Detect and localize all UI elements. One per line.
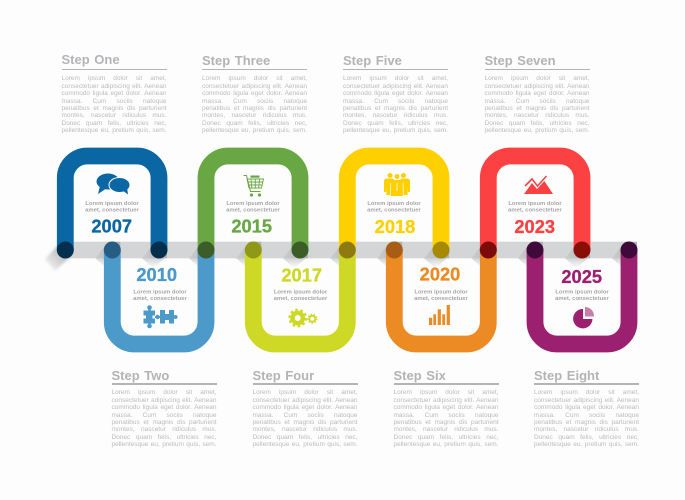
- captions in loops: amet, consectetuer: [226, 208, 281, 214]
- icon: gears: [289, 310, 317, 326]
- year labels: 2015: [231, 216, 272, 237]
- horizontal band: [65, 242, 629, 258]
- text block: Step One: pellentesque eu, pretium quis, sem.: [62, 127, 166, 134]
- panel: 2023 loop: [488, 156, 582, 250]
- text block: Step Two: consectetuer adipiscing elit. Aenean: [112, 397, 216, 404]
- text block: Step Two: commodo ligula eget dolor. Aenean: [112, 404, 216, 411]
- text block: Step Two: Lorem ipsum dolor sit amet,: [112, 389, 216, 396]
- text block: Step Six: Step Six: [394, 368, 446, 383]
- captions in loops: amet, consectetuer: [133, 296, 188, 302]
- text block: Step Eight: Donec quam felis, ultricies nec,: [534, 434, 639, 441]
- captions in loops: amet, consectetuer: [274, 296, 328, 302]
- text block: Step Two: Donec quam felis, ultricies nec,: [112, 434, 216, 441]
- captions in loops: [85, 201, 610, 302]
- year labels: 2020: [420, 264, 460, 285]
- text block: Step Eight: massa. Cum sociis natoque: [534, 412, 639, 419]
- text block: Step Six: Donec quam felis, ultricies nec,: [394, 434, 498, 441]
- text block: Step Five: massa. Cum sociis natoque: [343, 98, 448, 105]
- panel: 2025 loop: [535, 250, 629, 344]
- captions in loops: amet, consectetuer: [555, 296, 610, 302]
- text block: Step Two: massa. Cum sociis natoque: [112, 412, 216, 419]
- text block: Step Eight: Lorem ipsum dolor sit amet,: [534, 389, 639, 396]
- icon: shopping cart: [244, 176, 264, 197]
- text block: Step Three: commodo ligula eget dolor. Aenean: [202, 90, 307, 97]
- text block: Step Three: [202, 53, 307, 134]
- year labels: 2017: [281, 265, 322, 286]
- text block: Step Five: [343, 53, 448, 134]
- text block: Step Seven: [484, 53, 590, 134]
- text block: Step Four: massa. Cum sociis natoque: [252, 412, 358, 419]
- text block: Step Two: Step Two: [112, 368, 169, 383]
- band shadows: [45, 242, 637, 271]
- text block: Step Three: Step Three: [202, 53, 270, 68]
- icon: puzzle pieces: [143, 305, 178, 328]
- captions in loops: Lorem ipsum dolor: [133, 289, 187, 295]
- year labels: 2007: [91, 216, 132, 237]
- text block: Step Seven: Step Seven: [484, 53, 556, 68]
- text block: Step One: Lorem ipsum dolor sit amet,: [62, 75, 166, 82]
- text block: Step One: commodo ligula eget dolor. Aenean: [62, 90, 166, 97]
- captions in loops: Lorem ipsum dolor: [226, 201, 280, 207]
- text block: Step Six: penatibus et magnis dis parturient: [394, 419, 498, 426]
- text block: Step Four: Step Four: [252, 368, 314, 383]
- text block: Step Seven: pellentesque eu, pretium quis, sem.: [484, 127, 590, 134]
- text block: Step Seven: penatibus et magnis dis parturient: [484, 105, 590, 112]
- text block: Step Three: massa. Cum sociis natoque: [202, 98, 307, 105]
- year labels: 2025: [561, 266, 602, 287]
- panel: 2015 loop: [206, 156, 300, 250]
- text block: Step Five: montes, nascetur ridiculus mus.: [343, 112, 448, 119]
- text block: Step Four: commodo ligula eget dolor. Aenean: [252, 404, 358, 411]
- text block: Step Two: penatibus et magnis dis parturient: [112, 419, 216, 426]
- icon: pie chart: [573, 307, 594, 328]
- text block: Step Eight: commodo ligula eget dolor. Aenean: [534, 404, 639, 411]
- text block: Step Four: Donec quam felis, ultricies nec,: [252, 434, 358, 441]
- text block: Step One: [62, 52, 167, 134]
- text block: Step Seven: Donec quam felis, ultricies nec,: [484, 120, 590, 127]
- text block: Step Four: montes, nascetur ridiculus mus.: [252, 426, 358, 433]
- text block: Step Eight: [534, 368, 639, 448]
- text block: Step Eight: Step Eight: [534, 368, 599, 383]
- text block: Step Seven: commodo ligula eget dolor. Aenean: [484, 90, 590, 97]
- text block: Step Six: commodo ligula eget dolor. Aenean: [394, 404, 498, 411]
- captions in loops: Lorem ipsum dolor: [85, 201, 139, 207]
- text block: Step Four: penatibus et magnis dis parturient: [252, 419, 358, 426]
- text block: Step Six: pellentesque eu, pretium quis, sem.: [394, 441, 498, 448]
- icon: mountain chart: [524, 176, 553, 194]
- icon: people group: [384, 173, 410, 196]
- year labels: 2010: [136, 264, 177, 285]
- text block: Step One: consectetuer adipiscing elit. Aenean: [62, 83, 166, 90]
- text block: Step Three: Donec quam felis, ultricies nec,: [202, 120, 307, 127]
- text block: Step Five: pellentesque eu, pretium quis, sem.: [343, 127, 448, 134]
- text block: Step Four: Lorem ipsum dolor sit amet,: [252, 389, 358, 396]
- text block: Step Seven: massa. Cum sociis natoque: [484, 98, 590, 105]
- captions in loops: Lorem ipsum dolor: [555, 289, 609, 295]
- captions in loops: Lorem ipsum dolor: [414, 289, 468, 295]
- text block: Step Six: montes, nascetur ridiculus mus.: [394, 426, 498, 433]
- captions in loops: amet, consectetuer: [414, 296, 469, 302]
- year labels: 2023: [514, 216, 555, 237]
- text block: Step Eight: penatibus et magnis dis parturient: [534, 419, 639, 426]
- panel: 2010 loop: [112, 250, 206, 344]
- text block: Step Five: commodo ligula eget dolor. Aenean: [343, 90, 448, 97]
- text block: Step Two: pellentesque eu, pretium quis, sem.: [112, 441, 216, 448]
- text block: Step Five: penatibus et magnis dis parturient: [343, 105, 448, 112]
- text block: Step Eight: consectetuer adipiscing elit. Aenean: [534, 397, 639, 404]
- captions in loops: Lorem ipsum dolor: [367, 201, 421, 207]
- text block: Step Six: consectetuer adipiscing elit. Aenean: [394, 397, 498, 404]
- captions in loops: amet, consectetuer: [508, 208, 563, 214]
- text block: Step Seven: consectetuer adipiscing elit. Aenean: [484, 83, 590, 90]
- text block: Step Six: Lorem ipsum dolor sit amet,: [394, 389, 498, 396]
- text block: Step Seven: Lorem ipsum dolor sit amet,: [484, 75, 590, 82]
- text block: Step Three: consectetuer adipiscing elit. Aenean: [202, 83, 307, 90]
- captions in loops: amet, consectetuer: [367, 208, 422, 214]
- text block: Step Six: massa. Cum sociis natoque: [394, 412, 498, 419]
- text block: Step Eight: montes, nascetur ridiculus mus.: [534, 426, 639, 433]
- text block: Step Three: pellentesque eu, pretium quis, sem.: [202, 127, 307, 134]
- panel: 2017 loop: [253, 250, 347, 344]
- text block: Step Five: consectetuer adipiscing elit. Aenean: [343, 83, 448, 90]
- text block: Step Two: [112, 368, 217, 448]
- text block: Step Four: consectetuer adipiscing elit. Aenean: [252, 397, 358, 404]
- panel: 2018 loop: [347, 156, 441, 250]
- text block: Step Two: montes, nascetur ridiculus mus.: [112, 426, 216, 433]
- text block: Step One: montes, nascetur ridiculus mus.: [62, 112, 166, 119]
- text block: Step One: Donec quam felis, ultricies nec,: [62, 120, 166, 127]
- captions in loops: Lorem ipsum dolor: [508, 201, 562, 207]
- panel: 2007 loop: [65, 156, 159, 250]
- icon: bar chart: [429, 305, 450, 325]
- text block: Step One: massa. Cum sociis natoque: [62, 98, 166, 105]
- text block: Step Three: Lorem ipsum dolor sit amet,: [202, 75, 307, 82]
- text block: Step Four: pellentesque eu, pretium quis, sem.: [252, 441, 358, 448]
- text block: Step Five: Donec quam felis, ultricies nec,: [343, 120, 448, 127]
- icon: speech bubbles: [96, 174, 130, 194]
- text block: Step Six: [394, 368, 499, 448]
- text block: Step Three: penatibus et magnis dis parturient: [202, 105, 307, 112]
- year labels: [91, 216, 602, 287]
- text block: Step Three: montes, nascetur ridiculus mus.: [202, 112, 307, 119]
- text block: Step Five: Step Five: [343, 53, 402, 68]
- captions in loops: amet, consectetuer: [85, 208, 140, 214]
- year labels: 2018: [375, 216, 415, 237]
- text block: Step Eight: pellentesque eu, pretium quis, sem.: [534, 441, 639, 448]
- text block: Step Five: Lorem ipsum dolor sit amet,: [343, 75, 448, 82]
- captions in loops: Lorem ipsum dolor: [274, 289, 328, 295]
- text block: Step Four: [252, 368, 358, 448]
- junction circles: [57, 242, 638, 258]
- panel: 2020 loop: [394, 250, 488, 344]
- text block: Step Seven: montes, nascetur ridiculus mus.: [484, 112, 590, 119]
- text block: Step One: penatibus et magnis dis parturient: [62, 105, 166, 112]
- text block: Step One: Step One: [62, 52, 120, 67]
